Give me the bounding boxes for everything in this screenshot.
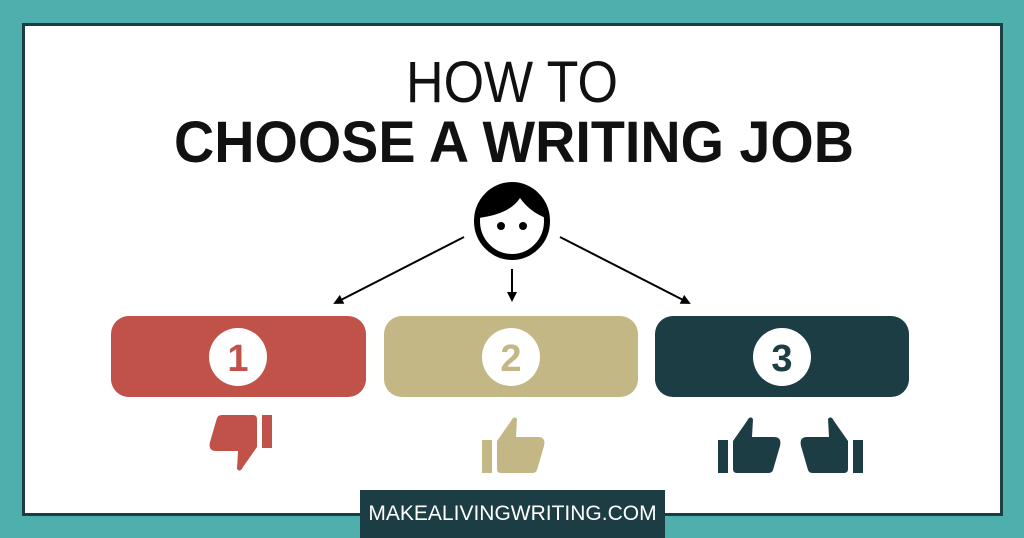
option 1 box	[111, 316, 366, 397]
icon: thumb up right	[801, 417, 863, 473]
title line 2: CHOOSE A WRITING JOB	[174, 110, 854, 175]
icon: thumb down	[210, 415, 272, 471]
option 2 box: 2	[500, 338, 522, 380]
option 2 box	[384, 316, 638, 397]
footer label: MAKEALIVINGWRITING.COM	[368, 502, 657, 525]
footer label	[360, 490, 665, 538]
option 3 box: 3	[771, 338, 793, 380]
option 1 box: 1	[227, 338, 249, 380]
arrow: middle	[511, 269, 513, 300]
icon: person face	[477, 185, 547, 257]
icon: thumb up left	[718, 417, 780, 473]
arrow: left	[335, 237, 464, 303]
option 3 box	[655, 316, 909, 397]
icon: thumb up	[482, 417, 544, 473]
arrow: right	[560, 237, 689, 303]
title line 1: HOW TO	[406, 50, 618, 115]
